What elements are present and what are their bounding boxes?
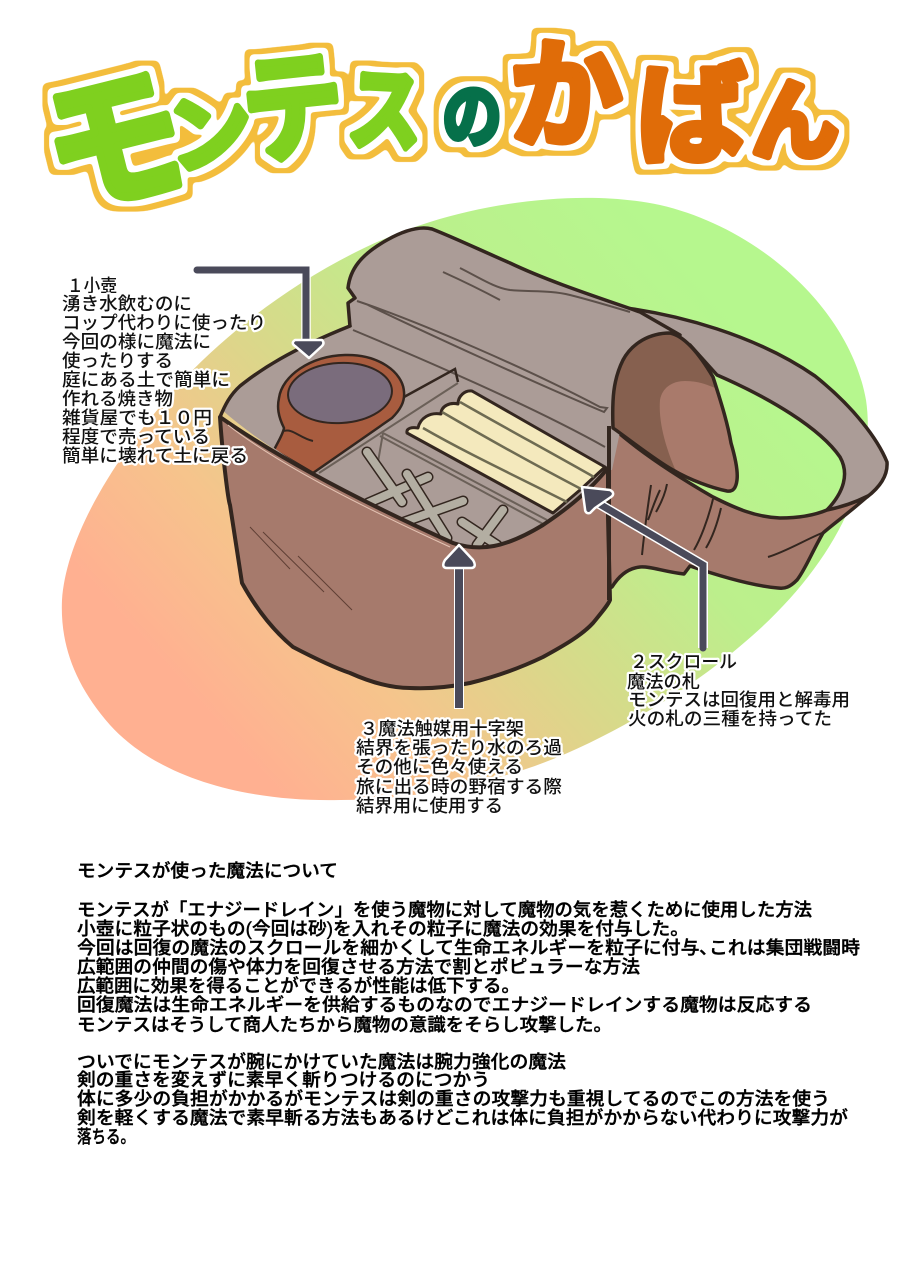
body text: about the magic: モンテスが使った魔法について [77,860,338,881]
arrow 1: to pot [197,270,324,358]
illustration: bag [220,228,887,688]
body text: about the magic: 今回は回復の魔法のスクロールを細かくして生命エネルギーを粒子に付与､これは集団戦闘時 [77,938,860,958]
title: ス [345,34,426,171]
label 2: scroll: 魔法の札 [627,672,700,692]
body text: about the magic: 小壺に粒子状のもの(今回は砂)を入れその粒子に魔法の効果を付与した。 [77,919,689,939]
label 3: cross: ３魔法触媒用十字架 [360,719,524,739]
icon: crosses [367,452,503,545]
label 1: pot: 作れる焼き物 [62,389,173,409]
label 1: pot [62,276,266,466]
label 3: cross: 結界を張ったり水のろ過 [356,738,562,758]
body text: about the magic: 落ちる。 [77,1127,135,1147]
background colour blob [62,198,868,800]
label 1: pot: 湧き水飲むのに [62,294,192,314]
flap light area [660,381,736,490]
flap outline [613,333,737,491]
title: の [442,60,502,161]
label 1: pot: 庭にある土で簡単に [62,370,230,390]
arrow 2: to scrolls [582,487,703,648]
label 1: pot: 今回の様に魔法に [62,332,211,352]
lid outline [348,228,680,335]
title: モ [18,9,204,253]
label 1: pot: コップ代わりに使ったり [62,313,266,333]
label 3: cross: 旅に出る時の野宿する際 [356,777,562,797]
bag right edge [607,426,611,600]
body text: about the magic: ついでにモンテスが腕にかけていた魔法は腕力強化の魔法 [77,1051,566,1072]
interior rim outline [220,326,350,417]
label 2: scroll: 火の札の三種を持ってた [628,709,832,729]
title: か [510,2,622,172]
label 2: scroll: モンテスは回復用と解毒用 [628,690,850,710]
title: テ [233,9,351,189]
title: ん [751,51,839,178]
body text: about the magic: モンテスはそうして商人たちから魔物の意識をそらし攻撃した。 [77,1015,612,1035]
label 2: scroll: ２スクロール [630,652,737,672]
body text: about the magic: 広範囲の仲間の傷や体力を回復させる方法で割とポピュラーな方法 [77,957,640,977]
body text: about the magic: 剣の重さを変えずに素早く斬りつけるのにつかう [77,1070,490,1090]
icon: clay pot [274,355,404,473]
scroll separator lines [423,402,594,502]
label 1: pot: 使ったりする [62,351,173,371]
bag interior [220,326,613,547]
body text: about the magic [77,860,860,1147]
label 2: scroll [627,652,850,729]
title: ば [637,26,747,186]
body text: about the magic: 広範囲に効果を得ることができるが性能は低下する。 [77,975,520,996]
title [18,2,839,253]
strap: brown lower band [604,428,868,590]
label 3: cross: 結界用に使用する [356,796,503,816]
front panel scratches [250,527,352,610]
body text: about the magic: 回復魔法は生命エネルギーを供給するものなのでエナジードレインする魔物は反応する [77,995,812,1015]
body text: about the magic: モンテスが「エナジードレイン」を使う魔物に対して魔物の気を惹くために使用した方法 [77,899,812,920]
lid fill [348,228,680,470]
label 3: cross [356,719,562,816]
side loop flap [613,333,750,500]
arrow 3: to crosses [443,545,475,709]
interior crease lines [353,268,630,447]
body text: about the magic: 体に多少の負担がかかるがモンテスは剣の重さの攻撃力も重視してるのでこの方法を使う [77,1088,830,1109]
compartment dividers [404,369,458,397]
label 1: pot: １小壺 [67,276,117,296]
front panel rim highlight [228,425,450,547]
body text: about the magic: 剣を軽くする魔法で素早斬る方法もあるけどこれは体に負担がかからない代わりに攻撃力が [77,1107,848,1128]
strap: outer grey band [600,305,887,512]
label 1: pot: 雑貨屋でも１０円 [62,408,212,428]
label 3: cross: その他に色々使える [356,757,523,777]
bag front panel [220,417,610,688]
pot opening [287,360,393,426]
title: ン [159,61,259,192]
icon: scrolls [407,391,605,513]
strap seam lines [642,484,822,557]
label 1: pot: 簡単に壊れて土に戻る [62,446,248,466]
label 1: pot: 程度で売っている [62,427,210,447]
